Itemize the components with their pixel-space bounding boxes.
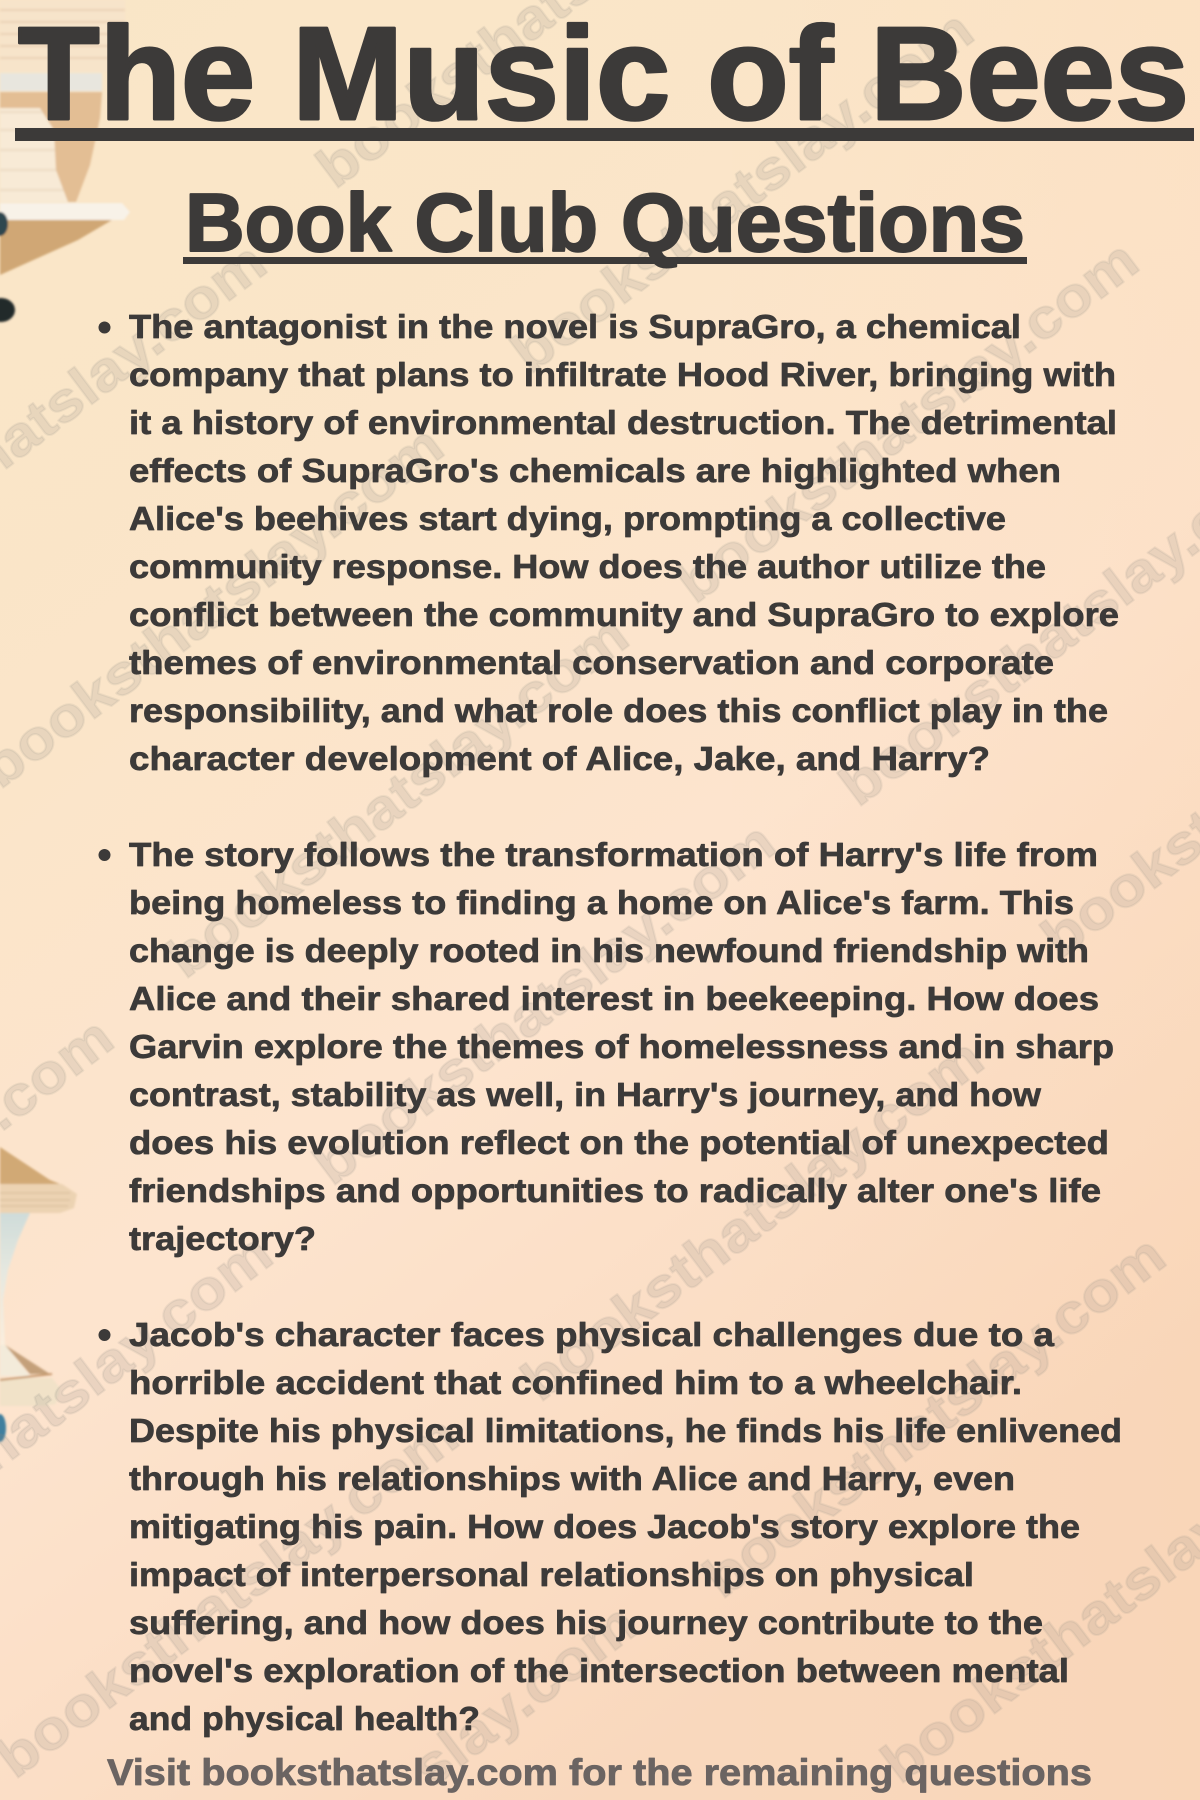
question 1: Alice's beehives start dying, prompting a collective xyxy=(129,500,1006,537)
question 2: friendships and opportunities to radically alter one's life xyxy=(129,1172,1101,1209)
subtitle: Book Club Questions xyxy=(185,176,1025,269)
question 3: through his relationships with Alice and Harry, even xyxy=(129,1460,1015,1497)
question 3: Jacob's character faces physical challenges due to a xyxy=(129,1316,1055,1353)
watermarks: repeated site name: booksthatslay.com xyxy=(509,1025,994,1413)
question 2: being homeless to finding a home on Alice's farm. This xyxy=(129,884,1074,921)
question 2: trajectory? xyxy=(129,1220,316,1257)
question 2: change is deeply rooted in his newfound friendship with xyxy=(129,932,1089,969)
question 3: and physical health? xyxy=(129,1700,480,1737)
watermarks: repeated site name: booksthatslay.com xyxy=(691,1222,1176,1610)
question 1: company that plans to infiltrate Hood River, bringing with xyxy=(129,356,1116,393)
question 1: effects of SupraGro's chemicals are highlighted when xyxy=(129,452,1061,489)
question 2: contrast, stability as well, in Harry's journey, and how xyxy=(129,1076,1041,1113)
illustration: top book stack at left edge xyxy=(0,0,130,322)
question 1: it a history of environmental destruction. The detrimental xyxy=(129,404,1117,441)
illustration: lower book stack at left edge xyxy=(0,1147,77,1442)
question 3: mitigating his pain. How does Jacob's story explore the xyxy=(129,1508,1080,1545)
question 1: character development of Alice, Jake, and Harry? xyxy=(129,740,990,777)
watermarks: repeated site name: booksthatslay.com xyxy=(301,809,786,1197)
watermarks: repeated site name: booksthatslay.com xyxy=(154,602,639,990)
question 2: does his evolution reflect on the potential of unexpected xyxy=(129,1124,1109,1161)
watermarks: repeated site name: booksthatslay.com xyxy=(664,227,1149,615)
question 3: impact of interpersonal relationships on physical xyxy=(129,1556,974,1593)
question 1: conflict between the community and SupraGro to explore xyxy=(129,596,1119,633)
question 1: The antagonist in the novel is SupraGro, a chemical xyxy=(129,308,1021,345)
question 2: The story follows the transformation of Harry's life from xyxy=(129,836,1098,873)
footer call to action: Visit booksthatslay.com for the remaining questions xyxy=(107,1752,1092,1793)
question 3: novel's exploration of the intersection between mental xyxy=(129,1652,1069,1689)
question 1: responsibility, and what role does this conflict play in the xyxy=(129,692,1108,729)
watermarks: repeated site name: booksthatslay.com xyxy=(499,0,984,385)
watermarks: repeated site name: slay.com xyxy=(399,1590,648,1800)
question 2: Alice and their shared interest in beekeeping. How does xyxy=(129,980,1099,1017)
title: The Music of Bees xyxy=(18,0,1189,147)
question 2 xyxy=(98,836,1114,1257)
question 1 xyxy=(98,308,1119,777)
question 3 xyxy=(98,1316,1122,1737)
question 3: suffering, and how does his journey contribute to the xyxy=(129,1604,1043,1641)
question 3: Despite his physical limitations, he finds his life enlivened xyxy=(129,1412,1122,1449)
question 1: themes of environmental conservation and corporate xyxy=(129,644,1054,681)
question 2: Garvin explore the themes of homelessness and in sharp xyxy=(129,1028,1114,1065)
question 1: community response. How does the author utilize the xyxy=(129,548,1046,585)
question 3: horrible accident that confined him to a wheelchair. xyxy=(129,1364,1022,1401)
